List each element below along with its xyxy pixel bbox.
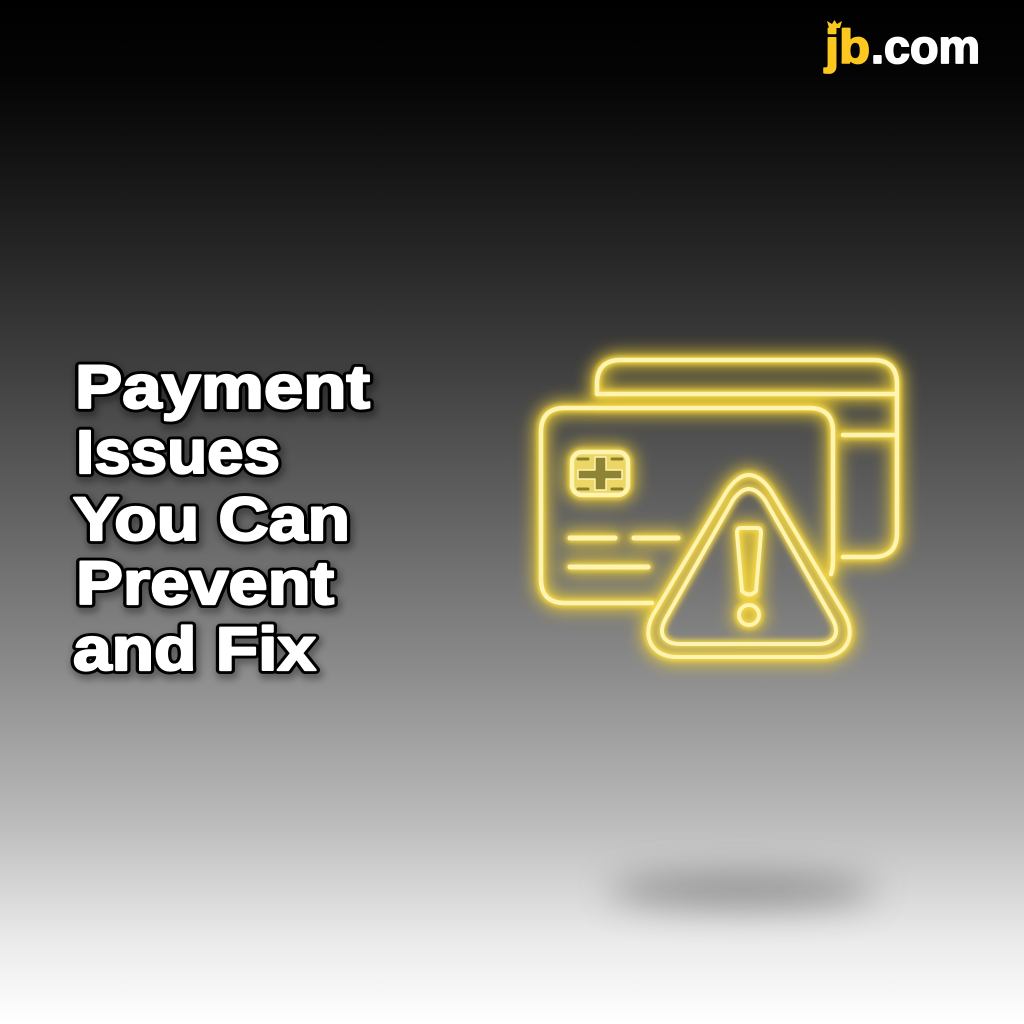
wide glow: [541, 360, 897, 657]
warning triangle: [648, 475, 850, 657]
title text: Prevent: [76, 549, 334, 617]
title outline: You Can: [73, 485, 350, 553]
title text: You Can: [73, 485, 350, 553]
title shadow: Issues: [78, 422, 282, 490]
title shadow: You Can: [75, 489, 352, 557]
title shadow: Payment: [77, 357, 372, 425]
floating shadow: [607, 874, 877, 906]
title outline: [73, 353, 370, 683]
title shadow: Prevent: [78, 553, 336, 621]
back card: [597, 360, 897, 557]
logo jb: jb: [824, 20, 870, 73]
icon: crown: [827, 20, 842, 28]
near glow: [541, 360, 897, 657]
title shadow: [75, 357, 372, 687]
title: [73, 353, 372, 687]
title text: [73, 353, 370, 683]
icon: neon credit cards with warning triangle: [541, 360, 897, 657]
card text lines: [570, 538, 678, 567]
front card: [541, 408, 833, 603]
exclamation mark: [737, 528, 761, 625]
title text: Issues: [76, 418, 280, 486]
title outline: Payment: [75, 353, 370, 421]
title text: and Fix: [73, 615, 316, 683]
title outline: and Fix: [73, 615, 316, 683]
logo: jb.com: [824, 20, 980, 73]
title text: Payment: [75, 353, 370, 421]
logo .com: .com: [871, 20, 980, 73]
title shadow: and Fix: [75, 619, 318, 687]
title outline: Issues: [76, 418, 280, 486]
card chip: [572, 452, 628, 495]
title outline: Prevent: [76, 549, 334, 617]
